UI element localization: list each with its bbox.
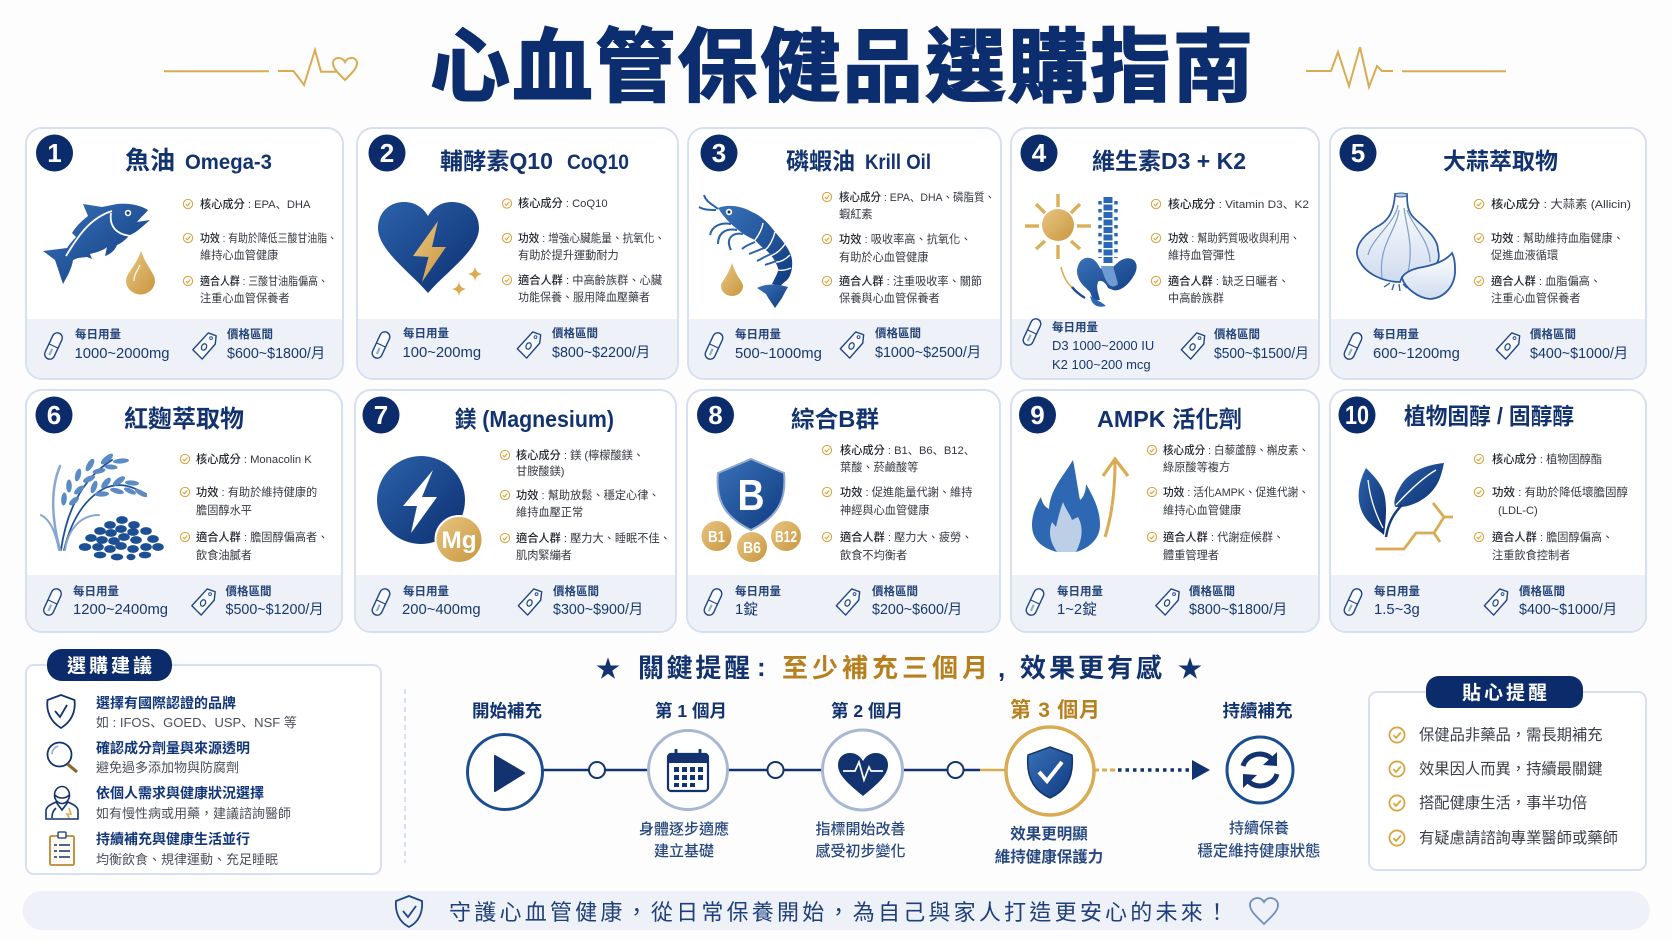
price range: 價格區間 bbox=[872, 584, 918, 598]
price range bbox=[1181, 327, 1309, 362]
reminder 4: 有疑慮請諮詢專業醫師或藥師 bbox=[1419, 830, 1618, 847]
daily dose: 1錠 bbox=[735, 601, 758, 618]
advice 1: 選擇有國際認證的品牌 bbox=[96, 695, 236, 711]
bullet list bbox=[183, 197, 337, 305]
daily dose: 每日用量 bbox=[1374, 584, 1420, 598]
number badge 6: 6 bbox=[47, 400, 61, 430]
number badge 7: 7 bbox=[374, 400, 388, 430]
price range bbox=[836, 584, 962, 618]
price range: 價格區間 bbox=[1189, 584, 1235, 598]
price range: $800~$2200/月 bbox=[552, 345, 650, 361]
advice 2: 避免過多添加物與防腐劑 bbox=[96, 760, 239, 775]
daily dose: 200~400mg bbox=[402, 602, 481, 618]
panel: card 1 fish oil bbox=[26, 128, 343, 379]
key reminder heading bbox=[596, 652, 1202, 683]
daily dose bbox=[371, 326, 481, 361]
icon: heart outline bbox=[1250, 898, 1278, 924]
bullet list bbox=[502, 196, 665, 304]
price range: $300~$900/月 bbox=[553, 602, 643, 618]
panel: card 3 krill oil bbox=[688, 128, 1001, 379]
key reminder heading: 關鍵提醒 bbox=[638, 653, 750, 683]
step: continuous: 持續補充 bbox=[1222, 701, 1293, 721]
key reminder heading: ★ bbox=[1178, 656, 1202, 683]
number badge 10: 10 bbox=[1345, 400, 1369, 430]
icon: shield bbox=[396, 896, 422, 927]
daily dose bbox=[703, 584, 781, 618]
advice 1: 如 : IFOS、GOED、USP、NSF 等 bbox=[96, 715, 297, 730]
number badge 8 bbox=[697, 396, 734, 434]
bullet list: 核心成分 : 鎂 (檸檬酸鎂、 bbox=[516, 448, 644, 462]
bullet list: 核心成分 : Monacolin K bbox=[196, 452, 312, 466]
bullet list bbox=[180, 452, 328, 562]
bullet list: 飲食不均衡者 bbox=[840, 548, 907, 562]
icon: clipboard bbox=[50, 832, 74, 865]
icon: garlic bbox=[1357, 193, 1455, 299]
icon: rice plant and grains bbox=[41, 452, 164, 560]
icon: sun, spine and pelvis bbox=[1025, 194, 1137, 307]
number badge 9: 9 bbox=[1030, 400, 1045, 430]
advice 4 bbox=[96, 831, 278, 867]
bullet list bbox=[822, 190, 995, 305]
bullet list: 核心成分 : EPA、DHA、磷脂質、 bbox=[839, 190, 995, 204]
bullet list: 功效 : 促進能量代謝、維持 bbox=[840, 485, 972, 499]
price range: $600~$1800/月 bbox=[227, 346, 325, 362]
card heading: 輔酵素Q10 bbox=[440, 148, 553, 174]
bullet list: 功效 : 吸收率高、抗氧化、 bbox=[839, 232, 971, 246]
daily dose bbox=[1025, 584, 1103, 618]
daily dose: 每日用量 bbox=[735, 584, 781, 598]
panel: card 2 CoQ10 bbox=[357, 128, 678, 379]
bullet list: 核心成分 : 植物固醇酯 bbox=[1492, 452, 1602, 466]
bullet list: 綠原酸等複方 bbox=[1163, 460, 1230, 474]
bullet list: 核心成分 : B1、B6、B12、 bbox=[840, 443, 975, 457]
bullet list: 維持心血管健康 bbox=[1163, 503, 1241, 517]
bullet list: 中高齡族群 bbox=[1168, 291, 1224, 305]
card heading: 鎂 (Magnesium) bbox=[455, 406, 614, 432]
price range bbox=[192, 584, 324, 618]
number badge 5 bbox=[1340, 134, 1376, 172]
panel: helpful reminders bbox=[1369, 676, 1646, 870]
number badge 1 bbox=[36, 134, 73, 172]
bullet list: (LDL-C) bbox=[1498, 505, 1538, 517]
daily dose: 1000~2000mg bbox=[74, 346, 170, 362]
number badge 4 bbox=[1020, 134, 1058, 172]
bullet list: 功效 : 有助於維持健康的 bbox=[196, 485, 317, 499]
connector lines bbox=[543, 762, 1189, 778]
timeline bbox=[468, 699, 1321, 866]
daily dose: 每日用量 bbox=[1052, 320, 1098, 334]
number badge 3: 3 bbox=[712, 138, 726, 168]
bullet list bbox=[822, 443, 975, 562]
bullet list: 飲食油膩者 bbox=[196, 548, 252, 562]
card heading: 綜合B群 bbox=[791, 406, 879, 432]
step: month 3 highlighted: 第 3 個月 bbox=[1010, 699, 1100, 722]
card heading: 大蒜萃取物 bbox=[1443, 148, 1558, 174]
heading pill: helpful reminders bbox=[1426, 676, 1583, 708]
daily dose: D3 1000~2000 IU bbox=[1052, 338, 1154, 353]
number badge 8: 8 bbox=[708, 400, 723, 430]
number badge 4: 4 bbox=[1032, 138, 1047, 168]
icon: B shield with vitamin coins bbox=[702, 459, 801, 562]
panel: card 6 red yeast rice bbox=[26, 390, 342, 632]
bullet list bbox=[1147, 443, 1309, 562]
bullet list: 神經與心血管健康 bbox=[840, 503, 930, 517]
bullet list: 功效 : 有助於降低壞膽固醇 bbox=[1492, 485, 1628, 499]
key reminder heading: 至少補充三個月 bbox=[782, 653, 988, 683]
bullet list: 適合人群 : 缺乏日曬者、 bbox=[1168, 274, 1289, 288]
price range: 價格區間 bbox=[1530, 327, 1576, 341]
price range: $200~$600/月 bbox=[872, 602, 962, 618]
icon: B shield with vitamin coins: B12 bbox=[775, 529, 797, 546]
key reminder heading: 效果更有感 bbox=[1020, 653, 1162, 683]
icon: shield check bbox=[47, 695, 75, 728]
decoration: left gold line with heartbeat and heart bbox=[164, 50, 357, 85]
daily dose: 1~2錠 bbox=[1057, 601, 1097, 618]
price range bbox=[193, 327, 325, 362]
price range: 價格區間 bbox=[875, 326, 921, 340]
bullet list: 注重心血管保養者 bbox=[200, 291, 290, 305]
daily dose: 1200~2400mg bbox=[73, 602, 168, 618]
price range: 價格區間 bbox=[226, 584, 272, 598]
card heading: 紅麴萃取物 bbox=[124, 406, 244, 433]
key reminder heading: , bbox=[998, 653, 1005, 683]
daily dose: 500~1000mg bbox=[735, 346, 822, 362]
bullet list: 膽固醇水平 bbox=[196, 503, 252, 517]
advice 4: 均衡飲食、規律運動、充足睡眠 bbox=[96, 852, 278, 867]
bullet list: 適合人群 : 壓力大、疲勞、 bbox=[840, 530, 972, 544]
icon: B shield with vitamin coins: B1 bbox=[708, 529, 725, 546]
bullet list: 體重管理者 bbox=[1163, 548, 1219, 562]
daily dose: 每日用量 bbox=[735, 327, 781, 341]
advice 3: 依個人需求與健康狀況選擇 bbox=[96, 785, 264, 801]
bullet list: 功效 : 增強心臟能量、抗氧化、 bbox=[518, 231, 665, 245]
card heading: 磷蝦油 bbox=[786, 148, 855, 174]
icon: magnesium bolt circle bbox=[377, 456, 482, 563]
panel: card 8 vitamin B complex bbox=[687, 390, 1000, 632]
bullet list bbox=[500, 448, 671, 562]
bullet list: 核心成分 : 大蒜素 (Allicin) bbox=[1491, 197, 1631, 211]
daily dose bbox=[43, 327, 170, 362]
reminder 2: 效果因人而異，持續最關鍵 bbox=[1419, 760, 1603, 778]
price range: $1000~$2500/月 bbox=[875, 345, 981, 361]
icon: B shield with vitamin coins: B6 bbox=[743, 540, 761, 557]
number badge 3 bbox=[700, 134, 738, 172]
step: month 3 highlighted: 維持健康保護力 bbox=[995, 847, 1103, 866]
price range: $500~$1500/月 bbox=[1214, 346, 1309, 362]
number badge 7 bbox=[362, 396, 400, 434]
bullet list: 核心成分 : CoQ10 bbox=[518, 196, 608, 210]
bullet list: 注重心血管保養者 bbox=[1491, 291, 1581, 305]
advice 2: 確認成分劑量與來源透明 bbox=[96, 740, 250, 756]
bullet list bbox=[1474, 452, 1628, 562]
price range bbox=[1496, 327, 1628, 362]
icon: fish and oil drop bbox=[43, 204, 155, 294]
daily dose bbox=[42, 584, 168, 618]
price range bbox=[840, 326, 981, 361]
bullet list: 功能保養、服用降血壓藥者 bbox=[518, 290, 650, 304]
price range: $400~$1000/月 bbox=[1530, 346, 1628, 362]
daily dose: 1.5~3g bbox=[1374, 602, 1420, 618]
step: month 3 highlighted: 效果更明顯 bbox=[1010, 824, 1088, 843]
daily dose: 每日用量 bbox=[403, 584, 449, 598]
price range: 價格區間 bbox=[227, 327, 273, 341]
bullet list: 維持血管彈性 bbox=[1168, 248, 1235, 262]
price range bbox=[517, 326, 650, 361]
bullet list: 功效 : 幫助放鬆、穩定心律、 bbox=[516, 488, 660, 502]
bullet list: 葉酸、菸鹼酸等 bbox=[840, 460, 918, 474]
step: month 1 bbox=[639, 701, 729, 860]
bullet list: 甘胺酸鎂) bbox=[516, 464, 565, 478]
card heading: AMPK 活化劑 bbox=[1097, 406, 1242, 432]
bullet list: 有助於提升運動耐力 bbox=[518, 248, 619, 262]
card heading: 維生素D3 + K2 bbox=[1092, 148, 1246, 174]
bullet list: 適合人群 : 注重吸收率、關節 bbox=[839, 274, 982, 288]
step: continuous bbox=[1197, 701, 1321, 860]
daily dose: 100~200mg bbox=[402, 345, 481, 361]
daily dose: 每日用量 bbox=[75, 327, 121, 341]
heading pill: helpful reminders: 貼心提醒 bbox=[1462, 682, 1550, 704]
bullet list: 功效 : 幫助維持血脂健康、 bbox=[1491, 231, 1624, 245]
bullet list: 保養與心血管保養者 bbox=[839, 291, 940, 305]
bullet list: 適合人群 : 中高齡族群、心臟 bbox=[518, 273, 662, 287]
bullet list: 有助於心血管健康 bbox=[839, 250, 929, 264]
step: month 1: 身體逐步適應 bbox=[639, 820, 729, 838]
number badge 5: 5 bbox=[1351, 138, 1365, 168]
title: 心血管保健品選購指南 bbox=[430, 23, 1253, 112]
daily dose: 每日用量 bbox=[1057, 584, 1103, 598]
step: start: 開始補充 bbox=[472, 701, 542, 721]
icon: B shield with vitamin coins: B bbox=[738, 471, 764, 520]
advice 4: 持續補充與健康生活並行 bbox=[96, 831, 250, 847]
footer banner bbox=[22, 891, 1650, 930]
card heading bbox=[125, 147, 272, 175]
price range: $500~$1200/月 bbox=[226, 602, 324, 618]
daily dose bbox=[1022, 317, 1154, 372]
bullet list: 適合人群 : 代謝症候群、 bbox=[1163, 530, 1284, 544]
step: month 3 highlighted bbox=[995, 699, 1103, 866]
step: month 2: 感受初步變化 bbox=[815, 842, 906, 860]
daily dose: K2 100~200 mcg bbox=[1052, 357, 1151, 372]
price range: 價格區間 bbox=[1214, 327, 1260, 341]
bullet list: 注重飲食控制者 bbox=[1492, 548, 1570, 562]
bullet list: 功效 : 幫助鈣質吸收與利用、 bbox=[1168, 231, 1300, 245]
icon: leaves and molecule bbox=[1359, 463, 1453, 549]
bullet list: 促進血液循環 bbox=[1491, 248, 1558, 262]
step: start bbox=[468, 701, 542, 810]
arrow to continuous step bbox=[1192, 760, 1210, 780]
bullet list bbox=[1474, 197, 1631, 305]
card heading bbox=[440, 148, 629, 174]
price range: 價格區間 bbox=[552, 326, 598, 340]
card heading: Krill Oil bbox=[865, 151, 931, 174]
daily dose bbox=[1343, 584, 1420, 618]
bullet list: 適合人群 : 膽固醇偏高者、 bbox=[196, 530, 328, 544]
step: continuous: 穩定維持健康狀態 bbox=[1197, 841, 1321, 860]
price range: $800~$1800/月 bbox=[1189, 602, 1287, 618]
number badge 9 bbox=[1019, 396, 1056, 434]
slogan: 守護心血管健康，從日常保養開始，為自己與家人打造更安心的未來！ bbox=[449, 900, 1228, 925]
card heading: 植物固醇 / 固醇醇 bbox=[1404, 403, 1574, 429]
panel: purchase advice bbox=[26, 649, 381, 874]
step: month 1: 第 1 個月 bbox=[655, 701, 727, 721]
bullet list: 肌肉緊繃者 bbox=[516, 548, 572, 562]
key reminder heading: ★ bbox=[596, 656, 620, 683]
daily dose bbox=[704, 327, 822, 362]
price range bbox=[518, 584, 643, 618]
advice 3 bbox=[96, 785, 291, 821]
bullet list bbox=[1151, 197, 1309, 305]
card heading: CoQ10 bbox=[567, 151, 629, 174]
price range bbox=[1156, 584, 1287, 618]
reminder 3: 搭配健康生活，事半功倍 bbox=[1419, 795, 1587, 812]
panel: card 9 AMPK activator bbox=[1011, 390, 1319, 632]
bullet list: 適合人群 : 三酸甘油脂偏高、 bbox=[200, 274, 328, 288]
step: continuous: 持續保養 bbox=[1229, 819, 1289, 837]
card heading: Omega-3 bbox=[185, 151, 272, 174]
advice 1 bbox=[96, 695, 297, 730]
panel: card 5 garlic extract bbox=[1330, 128, 1646, 379]
panel: card 7 magnesium bbox=[355, 390, 676, 632]
bullet list: 適合人群 : 血脂偏高、 bbox=[1491, 274, 1601, 288]
decoration: right gold heartbeat and line bbox=[1306, 47, 1506, 87]
price range: $400~$1000/月 bbox=[1519, 602, 1617, 618]
daily dose: 600~1200mg bbox=[1373, 346, 1460, 362]
number badge 10 bbox=[1338, 396, 1376, 434]
price range: 價格區間 bbox=[1519, 584, 1565, 598]
reminder 1: 保健品非藥品，需長期補充 bbox=[1419, 727, 1603, 744]
step: month 1: 建立基礎 bbox=[654, 842, 714, 860]
step: month 2: 第 2 個月 bbox=[831, 701, 903, 721]
number badge 2: 2 bbox=[380, 138, 394, 168]
number badge 1: 1 bbox=[47, 138, 62, 168]
number badge 2 bbox=[368, 134, 406, 172]
icon: shrimp and oil drop bbox=[699, 195, 792, 308]
heading pill: purchase advice bbox=[47, 649, 172, 681]
daily dose bbox=[1343, 327, 1460, 362]
daily dose bbox=[371, 584, 481, 618]
icon: heart with lightning bolt bbox=[378, 202, 482, 296]
advice 3: 如有慢性病或用藥，建議諮詢醫師 bbox=[96, 806, 291, 821]
price range bbox=[1484, 584, 1617, 618]
icon: doctor bbox=[46, 786, 78, 819]
bullet list: 功效 : 活化AMPK、促進代謝、 bbox=[1163, 485, 1309, 499]
icon: magnifier bbox=[48, 742, 77, 772]
card heading bbox=[786, 148, 931, 174]
bullet list: 適合人群 : 膽固醇偏高、 bbox=[1492, 530, 1613, 544]
bullet list: 核心成分 : EPA、DHA bbox=[200, 197, 311, 211]
icon: magnesium bolt circle: Mg bbox=[442, 527, 476, 554]
step: month 2 bbox=[815, 701, 906, 860]
panel: card 4 vitamin D3 + K2 bbox=[1011, 128, 1319, 379]
price range: 價格區間 bbox=[553, 584, 599, 598]
bullet list: 維持心血管健康 bbox=[200, 248, 278, 262]
daily dose: 每日用量 bbox=[1373, 327, 1419, 341]
bullet list: 維持血壓正常 bbox=[516, 505, 583, 519]
card heading: 魚油 bbox=[125, 147, 175, 175]
bullet list: 蝦紅素 bbox=[839, 208, 873, 221]
daily dose: 每日用量 bbox=[73, 584, 119, 598]
advice 2 bbox=[96, 740, 250, 775]
key reminder heading: : bbox=[757, 652, 766, 682]
daily dose: 每日用量 bbox=[403, 326, 449, 340]
bullet list: 功效 : 有助於降低三酸甘油脂、 bbox=[200, 231, 337, 245]
step: month 2: 指標開始改善 bbox=[815, 821, 906, 838]
bullet list: 核心成分 : Vitamin D3、K2 bbox=[1168, 197, 1309, 211]
panel: card 10 plant sterols bbox=[1330, 390, 1646, 632]
bullet list: 核心成分 : 白藜蘆醇、槲皮素、 bbox=[1163, 443, 1309, 457]
icon: flame with rising arrow bbox=[1032, 459, 1128, 552]
heading pill: purchase advice: 選購建議 bbox=[67, 655, 155, 677]
bullet list: 適合人群 : 壓力大、睡眠不佳、 bbox=[516, 531, 671, 545]
number badge 6 bbox=[36, 396, 72, 434]
